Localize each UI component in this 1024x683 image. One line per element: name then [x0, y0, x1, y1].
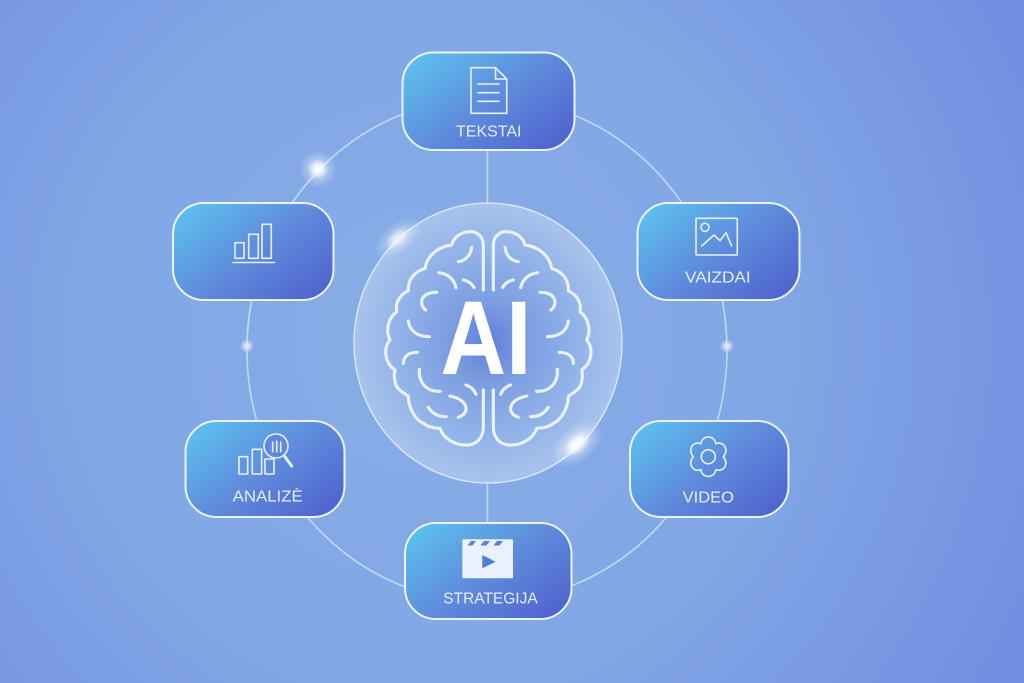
icon: video clapper: [462, 539, 513, 578]
connector: centre to bottom node: [486, 482, 488, 524]
icon: document: [471, 68, 507, 113]
label: VAIZDAI: [685, 270, 751, 287]
node: VIDEO: [630, 421, 788, 517]
icon: chart with magnifier: [239, 434, 292, 474]
label: STRATEGIJA: [443, 590, 538, 607]
label: ANALIZÈ: [233, 487, 303, 506]
central glass circle: [354, 203, 622, 483]
label: VIDEO: [683, 489, 734, 506]
node: ANALIZĖ: [186, 421, 344, 517]
circle sparkle: top left: [367, 209, 429, 267]
node: STRATEGIJA: [405, 523, 572, 619]
icon: bar chart: [233, 224, 274, 262]
circle sparkle: bottom right: [542, 411, 612, 477]
node: VAIZDAI: [638, 203, 800, 300]
node: chart: [173, 203, 334, 300]
AI heading: AI: [440, 279, 531, 396]
connector: top node to centre: [486, 150, 488, 204]
icon: image: [696, 218, 737, 255]
label: TEKSTAI: [456, 124, 522, 141]
ring dot: right: [721, 340, 733, 352]
ring sparkle: [299, 150, 337, 188]
ring dot: left: [241, 340, 253, 352]
icon: gear: [691, 437, 726, 476]
brain outline icon: [386, 232, 591, 445]
node: TEKSTAI: [402, 52, 574, 150]
orbit ring: [247, 98, 727, 602]
